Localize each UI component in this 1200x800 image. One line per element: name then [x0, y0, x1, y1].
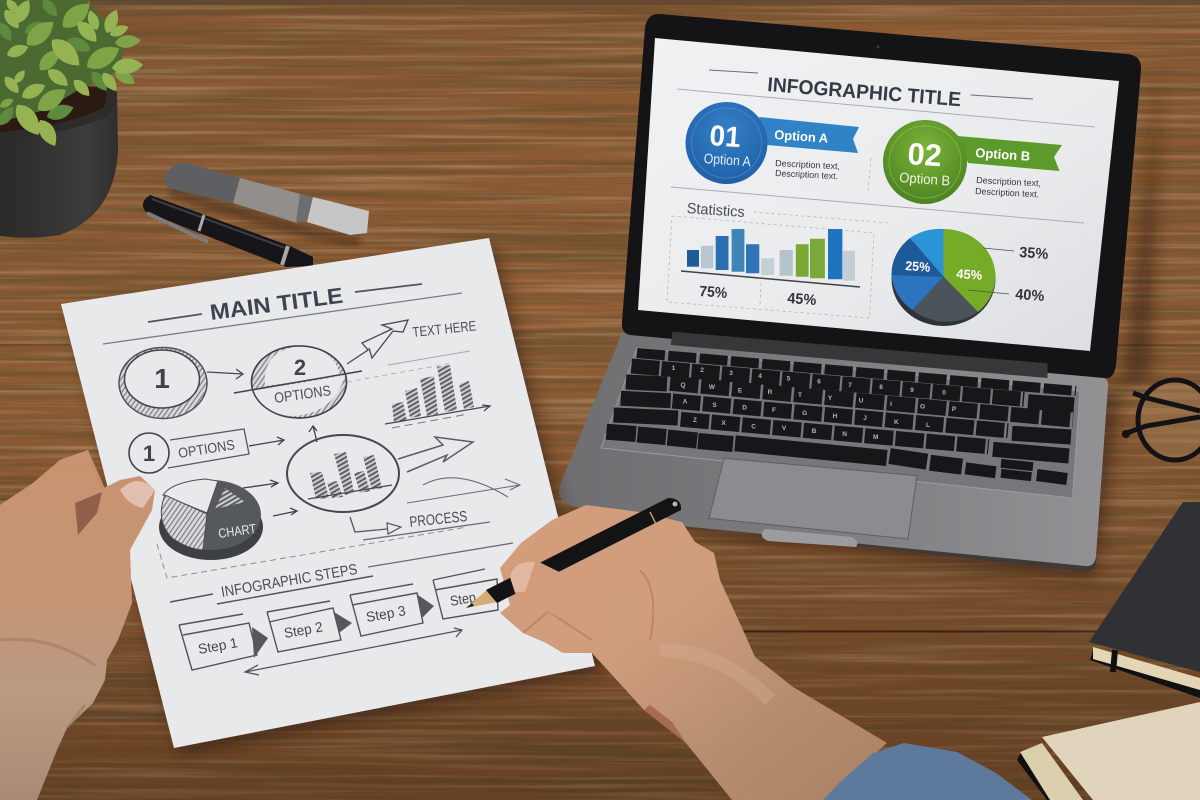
sketch pie chart: CHART: [217, 521, 257, 541]
sketch step 2: [267, 601, 352, 652]
sketch arrow to text here: [347, 317, 477, 364]
pencil in hand: [466, 498, 681, 608]
sketch circle 1: 1: [154, 363, 170, 394]
notebook: [1089, 502, 1200, 698]
sketch step 1: [179, 614, 268, 670]
option B: [883, 120, 1062, 204]
pie chart: [891, 229, 1049, 326]
pie chart: 45%: [956, 266, 983, 283]
sketch options box: OPTIONS: [177, 436, 236, 461]
pie chart: 40%: [1015, 286, 1045, 305]
sketch process: [157, 508, 513, 578]
statistics bar chart: 75%: [699, 283, 728, 302]
sketch step 3: Step 3: [365, 602, 407, 625]
notepad stack: [1017, 702, 1200, 800]
option B: Description text,: [976, 175, 1041, 188]
sketch process: PROCESS: [409, 508, 468, 531]
option A: Option A: [774, 127, 829, 146]
screen title: INFOGRAPHIC TITLE: [767, 74, 962, 111]
option A: [686, 102, 859, 184]
sketch options box: [129, 429, 284, 473]
sketch title: [103, 283, 462, 344]
option B: 02: [907, 136, 943, 173]
option A: 01: [709, 120, 742, 154]
sketch circle 2 options: OPTIONS: [273, 383, 332, 407]
option A: Option A: [703, 150, 752, 169]
sketch step 4: [433, 569, 498, 619]
screen title: [671, 70, 1095, 223]
marker: [164, 162, 369, 242]
potted plant: [0, 0, 144, 238]
sketch options box: 1: [143, 441, 155, 466]
sketch bar chart: [347, 351, 490, 428]
option B: Option B: [975, 145, 1031, 164]
statistics bar chart: 45%: [787, 290, 817, 309]
sketch step 1: Step 1: [197, 634, 239, 657]
thumb over pencil: [510, 560, 604, 632]
sketch step 2: Step 2: [283, 618, 324, 641]
sketch step 3: [350, 584, 434, 636]
left hand: [0, 450, 155, 800]
paper sketch: [61, 238, 595, 748]
sketch big arrow: [398, 437, 520, 503]
denim sleeve: [823, 743, 1032, 800]
sketch step 4: Step: [449, 589, 477, 609]
laptop screen: [638, 38, 1119, 351]
key letters: [672, 365, 957, 441]
right hand: [500, 505, 887, 800]
sketch arrow to text here: TEXT HERE: [412, 317, 477, 340]
sketch circle 1: [119, 348, 243, 418]
laptop base: [559, 333, 1108, 572]
black pen: [143, 195, 313, 267]
left hand fingers behind paper: [0, 450, 110, 560]
paper shadow: [70, 245, 602, 756]
sketch circle 2 options: 2: [294, 355, 306, 380]
key letters: QWERTYUIOP: [680, 382, 957, 413]
pie chart: 25%: [905, 258, 931, 275]
sketch long arrow: [245, 628, 462, 675]
statistics bar chart: Statistics: [686, 200, 745, 221]
key letters: 1234567890: [672, 365, 946, 397]
pie chart: 35%: [1019, 244, 1049, 263]
sketch steps heading: INFOGRAPHIC STEPS: [220, 561, 359, 601]
option B: Description text.: [975, 186, 1039, 199]
sketch circled bar chart: [287, 426, 399, 512]
sketch steps heading: [170, 561, 373, 604]
laptop lid and hinge: [622, 14, 1141, 378]
laptop: [559, 14, 1141, 572]
key letters: ZXCVBNM: [693, 417, 878, 441]
option B: Option B: [899, 169, 951, 189]
keyboard: [606, 353, 1076, 479]
sketch title: MAIN TITLE: [208, 283, 345, 325]
sketch pie chart: [159, 479, 297, 560]
option A: Description text.: [775, 168, 838, 181]
glasses: [1122, 380, 1200, 460]
statistics bar chart: [667, 158, 890, 318]
laptop shadow: [570, 60, 1160, 580]
option A: Description text,: [775, 158, 840, 171]
key letters: ASDFGHJKL: [683, 399, 930, 429]
sketch circle 2 options: [234, 346, 362, 418]
